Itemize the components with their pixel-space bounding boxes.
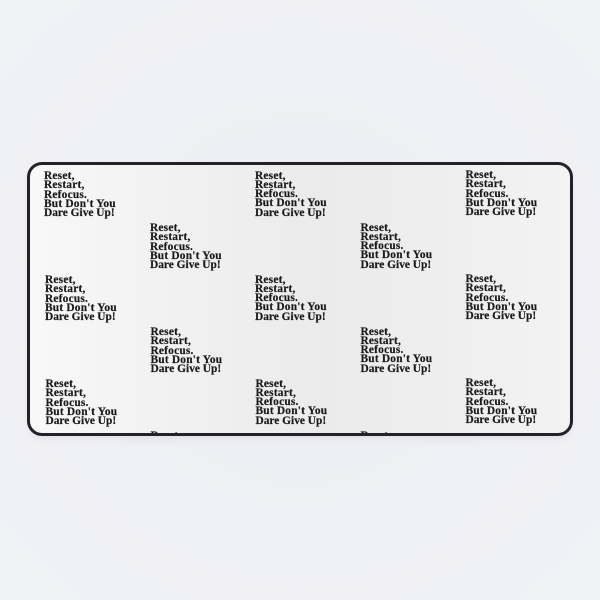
text block: row 2 column 4: Refocus. [360, 240, 404, 252]
text block: row 1 column 3: But Don't You [255, 197, 327, 209]
text block: row 3 column 1: Reset, [45, 274, 76, 286]
text block: row 5 column 1: Restart, [46, 387, 86, 399]
text block: row 4 column 2: Refocus. [150, 345, 194, 357]
text block: row 1 column 3 [255, 170, 327, 219]
text block: row 5 column 3: Dare Give Up! [256, 415, 326, 427]
text block: row 5 column 1: Reset, [46, 378, 76, 390]
text block: row 4 column 2: Dare Give Up! [150, 363, 221, 375]
text block: row 3 column 1: Dare Give Up! [45, 311, 116, 323]
text block: row 3 column 1: Refocus. [45, 293, 88, 305]
text block: row 3 column 5: Dare Give Up! [466, 310, 536, 322]
text block: row 2 column 2 [150, 222, 222, 271]
text block: row 5 column 1: But Don't You [46, 406, 117, 418]
text block: row 5 column 1 [46, 378, 117, 427]
text block: row 3 column 5: But Don't You [466, 301, 537, 313]
text block: row 5 column 1: Dare Give Up! [46, 415, 116, 427]
text block: row 4 column 2: But Don't You [150, 354, 222, 366]
text block: row 3 column 3: Dare Give Up! [255, 311, 326, 323]
text block: row 1 column 1: Reset, [44, 170, 75, 182]
text block: row 1 column 1: But Don't You [44, 198, 116, 210]
text block: row 4 column 4: Restart, [360, 335, 401, 347]
text block: row 2 column 4: Reset, [360, 222, 391, 234]
text block: row 5 column 5: But Don't You [466, 405, 537, 417]
text block: row 2 column 2: Refocus. [150, 241, 193, 253]
text block: row 1 column 5: Dare Give Up! [466, 206, 536, 218]
text block: row 1 column 1: Refocus. [44, 189, 87, 201]
text block: row 3 column 3 [255, 274, 327, 323]
text block: row 1 column 5: Restart, [466, 178, 506, 190]
text block: row 4 column 4: Refocus. [360, 344, 404, 356]
text block: row 3 column 3: But Don't You [255, 301, 327, 313]
text block: row 5 column 5 [466, 377, 537, 426]
text block: row 4 column 4 [360, 326, 432, 375]
text block: row 2 column 4: Restart, [360, 231, 401, 243]
text block: row 2 column 2: Reset, [150, 222, 181, 234]
desk mat panel [27, 162, 573, 436]
text block: row 1 column 1: Dare Give Up! [44, 207, 115, 219]
text block: row 4 column 4: Dare Give Up! [360, 363, 431, 375]
text block: row 4 column 4: But Don't You [360, 353, 432, 365]
text block: row 4 column 2: Restart, [150, 335, 191, 347]
text block: row 1 column 3: Dare Give Up! [255, 207, 326, 219]
text block: row 3 column 5: Restart, [466, 282, 506, 294]
text block: row 3 column 5 [466, 273, 537, 322]
text block: row 5 column 5: Refocus. [466, 396, 509, 408]
text block: row 5 column 5: Dare Give Up! [466, 414, 536, 426]
text block: row 2 column 4 [360, 222, 432, 271]
text block: row 1 column 3: Reset, [255, 170, 286, 182]
text block: row 5 column 1: Refocus. [46, 397, 89, 409]
text block: row 4 column 2 [150, 326, 222, 375]
text block: row 3 column 3: Reset, [255, 274, 286, 286]
text block: row 3 column 3: Restart, [255, 283, 296, 295]
text block: row 3 column 1: But Don't You [45, 302, 117, 314]
text block: row 5 column 5: Reset, [466, 377, 496, 389]
text block: row 1 column 3: Refocus. [255, 188, 298, 200]
mat shadow [29, 168, 571, 439]
text block: row 1 column 3: Restart, [255, 179, 296, 191]
text block: row 5 column 3: But Don't You [256, 405, 327, 417]
text block: row 3 column 5: Reset, [466, 273, 496, 285]
text block: row 4 column 2: Reset, [150, 326, 181, 338]
text block: row 2 column 2: But Don't You [150, 250, 222, 262]
text block: row 2 column 4: Dare Give Up! [360, 259, 431, 271]
text block: row 1 column 5: Refocus. [466, 188, 509, 200]
text block: row 2 column 2: Dare Give Up! [150, 259, 221, 271]
text block: row 1 column 5: But Don't You [466, 197, 537, 209]
text block: row 2 column 2: Restart, [150, 231, 190, 243]
text block: row 1 column 5: Reset, [466, 169, 496, 181]
text block: row 5 column 3: Refocus. [256, 396, 299, 408]
text block: row 3 column 1: Restart, [45, 283, 86, 295]
text block: row 5 column 3: Reset, [256, 378, 286, 390]
text block: row 5 column 3: Restart, [256, 387, 296, 399]
text block: row 5 column 3 [256, 378, 327, 427]
text block: row 5 column 5: Restart, [466, 386, 506, 398]
text block: row 2 column 4: But Don't You [360, 249, 432, 261]
text block: row 3 column 1 [45, 274, 117, 323]
text block: row 3 column 5: Refocus. [466, 292, 509, 304]
text block: row 1 column 5 [466, 169, 537, 218]
text block: row 4 column 4: Reset, [360, 326, 391, 338]
text block: row 1 column 1 [44, 170, 116, 219]
text block: row 3 column 3: Refocus. [255, 292, 298, 304]
text block: row 1 column 1: Restart, [44, 179, 84, 191]
